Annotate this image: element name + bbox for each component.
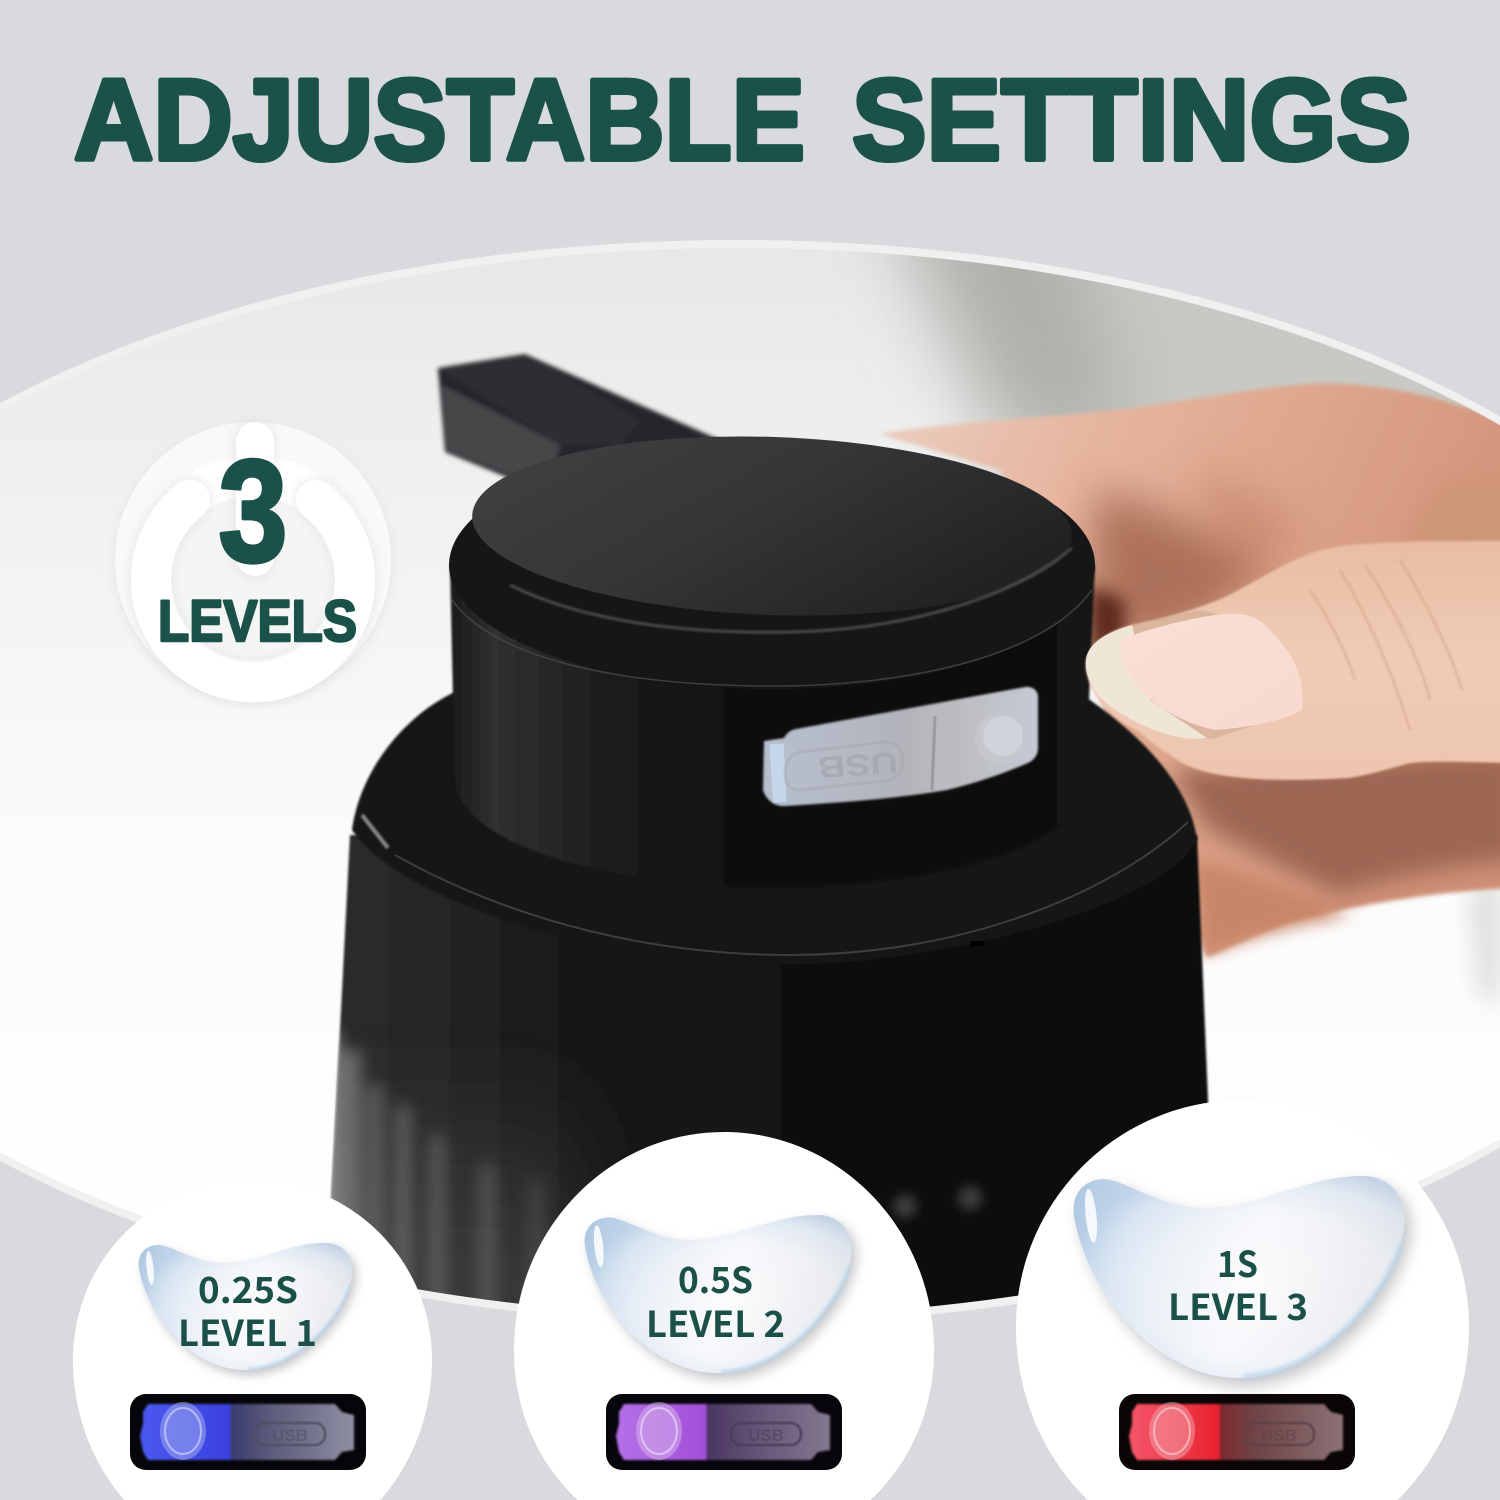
level 3 label: 1S [1217, 1236, 1258, 1288]
droplet 2 [585, 1215, 856, 1379]
panel: level 1 [73, 1180, 432, 1500]
level 1 label: 0.25S [198, 1262, 298, 1314]
knuckle creases [1310, 560, 1462, 730]
indicator: blue light [130, 1394, 366, 1470]
level 3 label [1168, 1236, 1308, 1331]
level 2 label: 0.5S [678, 1252, 753, 1304]
bubble 2 [514, 1132, 934, 1500]
indicator: blue light: USB [272, 1426, 308, 1445]
USB cover on dispenser: USB [817, 745, 899, 784]
base disc [352, 692, 1197, 965]
badge number: 3 [218, 430, 288, 592]
title: ADJUSTABLE [74, 56, 805, 184]
level 2 label: LEVEL 2 [646, 1296, 785, 1348]
neck cylinder [450, 565, 1095, 887]
title: SETTINGS [852, 56, 1411, 184]
indicator: red light: USB [1261, 1426, 1297, 1445]
droplet 3 [1074, 1176, 1411, 1386]
indicator: purple light [606, 1394, 842, 1470]
bubble 3 [1016, 1100, 1469, 1500]
top cap [449, 427, 1095, 689]
icon: power symbol [151, 420, 355, 682]
thumb [1086, 541, 1500, 780]
nail free edge [1086, 625, 1207, 739]
title [74, 56, 1411, 184]
photo rim [0, 240, 1500, 1324]
ribs [310, 1030, 982, 1360]
body of dispenser [330, 833, 1210, 1306]
hand: back fingers [879, 383, 1500, 958]
USB cover on dispenser [763, 687, 1038, 806]
panel: product photo [0, 248, 1500, 1306]
handle [438, 354, 720, 494]
photo backdrop [0, 248, 1500, 1216]
level 1 label [178, 1262, 317, 1357]
badge: 3 levels [113, 420, 393, 702]
bubble 1 [73, 1180, 432, 1500]
indicator: red light [1119, 1394, 1355, 1470]
panel: level 2 [514, 1132, 934, 1500]
badge label: LEVELS [158, 589, 357, 654]
indicator: purple light: USB [748, 1426, 784, 1445]
droplet 1 [139, 1243, 356, 1375]
nail [1120, 614, 1303, 730]
panel: level 3 [1016, 1100, 1469, 1500]
level 1 label: LEVEL 1 [178, 1305, 317, 1357]
level 2 label [646, 1252, 785, 1348]
level 3 label: LEVEL 3 [1168, 1279, 1308, 1331]
